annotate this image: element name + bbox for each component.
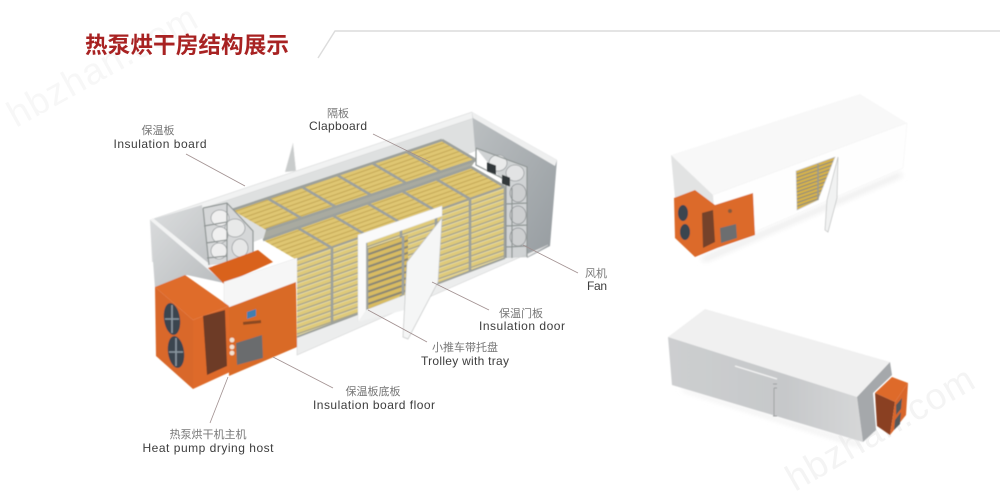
front row trolley trays: [297, 187, 505, 337]
host main panel: [227, 282, 297, 376]
label: insulation door: 保温门板: [499, 306, 543, 320]
left fan rack: [203, 203, 253, 265]
screen: [728, 209, 732, 213]
orange host unit: [875, 377, 908, 435]
label: insulation board: 保温板: [142, 123, 174, 137]
label: fan: 风机: [585, 266, 607, 280]
control screen: [247, 309, 256, 319]
back row tray tops: [232, 140, 476, 230]
label: insulation door: Insulation door: [479, 319, 565, 333]
ground shadow: [680, 388, 862, 447]
back wall: [150, 112, 478, 262]
box front face: [668, 337, 863, 442]
label: clapboard: [309, 106, 430, 162]
white front wall above host: [224, 258, 297, 308]
box front face: [713, 123, 907, 248]
box end face: [857, 362, 892, 442]
exterior view: door open: [671, 94, 907, 262]
label: fan: [523, 245, 607, 293]
label: heat pump drying host: [142, 377, 274, 455]
orange host unit: [674, 190, 755, 257]
label: trolley with tray: [368, 310, 509, 368]
ground shadow: [700, 172, 903, 262]
title: 热泵烘干房结构展示: [85, 33, 289, 58]
open door: [825, 157, 838, 232]
label: trolley with tray: 小推车带托盘: [432, 340, 498, 354]
label: trolley with tray: Trolley with tray: [421, 354, 509, 368]
floor: [297, 245, 548, 355]
back door flap: [285, 143, 296, 172]
grey access panel: [236, 335, 263, 365]
right fan rack: [476, 148, 527, 258]
host left face: [155, 287, 193, 389]
fan lower: [166, 335, 186, 369]
watermark: bottom right: hbzhan.com: [778, 358, 982, 499]
label: fan: Fan: [587, 279, 607, 293]
box top face: [668, 309, 890, 397]
label: clapboard: 隔板: [327, 106, 349, 120]
watermark: top left: hbzhan.com: [0, 0, 205, 135]
rear orange duct box: [208, 250, 273, 284]
door frame and opening: [358, 206, 442, 322]
brown vent: [203, 310, 227, 375]
title decorative rule: [318, 31, 1000, 58]
host front face: [193, 306, 230, 389]
label: insulation door: [432, 282, 565, 333]
label: heat pump drying host: Heat pump drying host: [142, 441, 274, 455]
door lock: [773, 384, 777, 416]
left wall top edge: [150, 218, 228, 283]
exterior view: door closed: [668, 309, 908, 447]
label: insulation board floor: 保温板底板: [346, 384, 400, 398]
label: clapboard: Clapboard: [309, 119, 367, 133]
top rim of back wall: [150, 112, 474, 225]
label: insulation board floor: [273, 357, 435, 412]
host top face: [155, 275, 229, 320]
brand mark: [243, 320, 261, 325]
box left face: [671, 155, 715, 205]
fan lower: [894, 412, 901, 430]
box top face: [671, 94, 907, 195]
main cutaway drying room illustration: [150, 112, 557, 389]
label: insulation board floor: Insulation board floor: [313, 398, 435, 412]
vent: [702, 210, 715, 248]
label: insulation board: Insulation board: [114, 137, 206, 151]
clapboard band: [263, 160, 476, 240]
label: insulation board: [114, 123, 245, 186]
fan upper: [162, 302, 182, 336]
fans: [678, 205, 688, 221]
control buttons: [230, 338, 234, 355]
door handle: [735, 366, 777, 379]
open insulation door: [403, 218, 442, 339]
right end wall: [472, 112, 557, 258]
heat pump drying host: [155, 275, 297, 389]
panel: [720, 224, 737, 243]
left end wall: [150, 205, 224, 288]
fan upper: [896, 398, 902, 415]
tray window: [796, 157, 835, 210]
label: heat pump drying host: 热泵烘干机主机: [170, 427, 246, 441]
front row tray tops: [263, 167, 505, 260]
